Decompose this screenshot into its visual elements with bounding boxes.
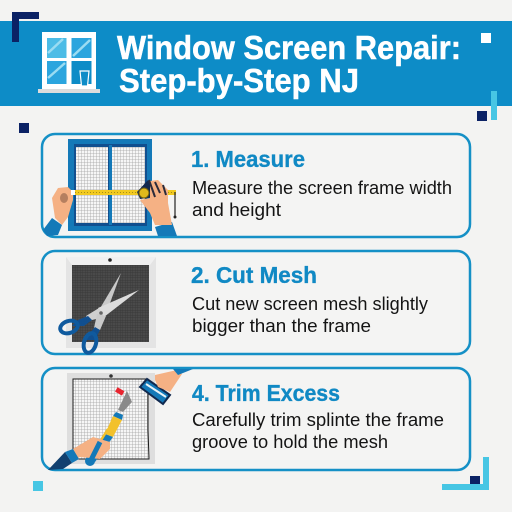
panel: step 2 cut mesh [42, 251, 470, 354]
corner accent: top left [12, 12, 39, 42]
description [192, 177, 452, 220]
panel: step 1 measure [42, 134, 470, 237]
heading: 4. Trim Excess [192, 380, 340, 406]
description: groove to hold the mesh [192, 431, 388, 452]
illustration: window frame and tape measure [43, 139, 177, 236]
description [192, 293, 429, 336]
accent: white square [481, 33, 491, 43]
title: Step-by-Step NJ [119, 63, 359, 100]
illustration: mesh and scissors [59, 257, 156, 354]
title [117, 30, 461, 100]
corner accent: bottom right [442, 457, 489, 490]
illustration: screen, roller and trim tool [48, 369, 193, 470]
heading: 1. Measure [191, 146, 305, 172]
heading: 2. Cut Mesh [191, 262, 317, 288]
description [192, 409, 444, 452]
description: and height [192, 199, 281, 220]
icon: window [38, 32, 100, 93]
title: Window Screen Repair: [117, 30, 461, 67]
description: Cut new screen mesh slightly [192, 293, 429, 314]
accent: cyan bar [491, 91, 497, 120]
accent: navy square left [19, 123, 29, 133]
header banner [0, 21, 512, 106]
description: Measure the screen frame width [192, 177, 452, 198]
description: bigger than the frame [192, 315, 371, 336]
accent: navy square right [477, 111, 487, 121]
description: Carefully trim splinte the frame [192, 409, 444, 430]
panel: step 4 trim excess [42, 368, 470, 470]
accent: cyan square [33, 481, 43, 491]
